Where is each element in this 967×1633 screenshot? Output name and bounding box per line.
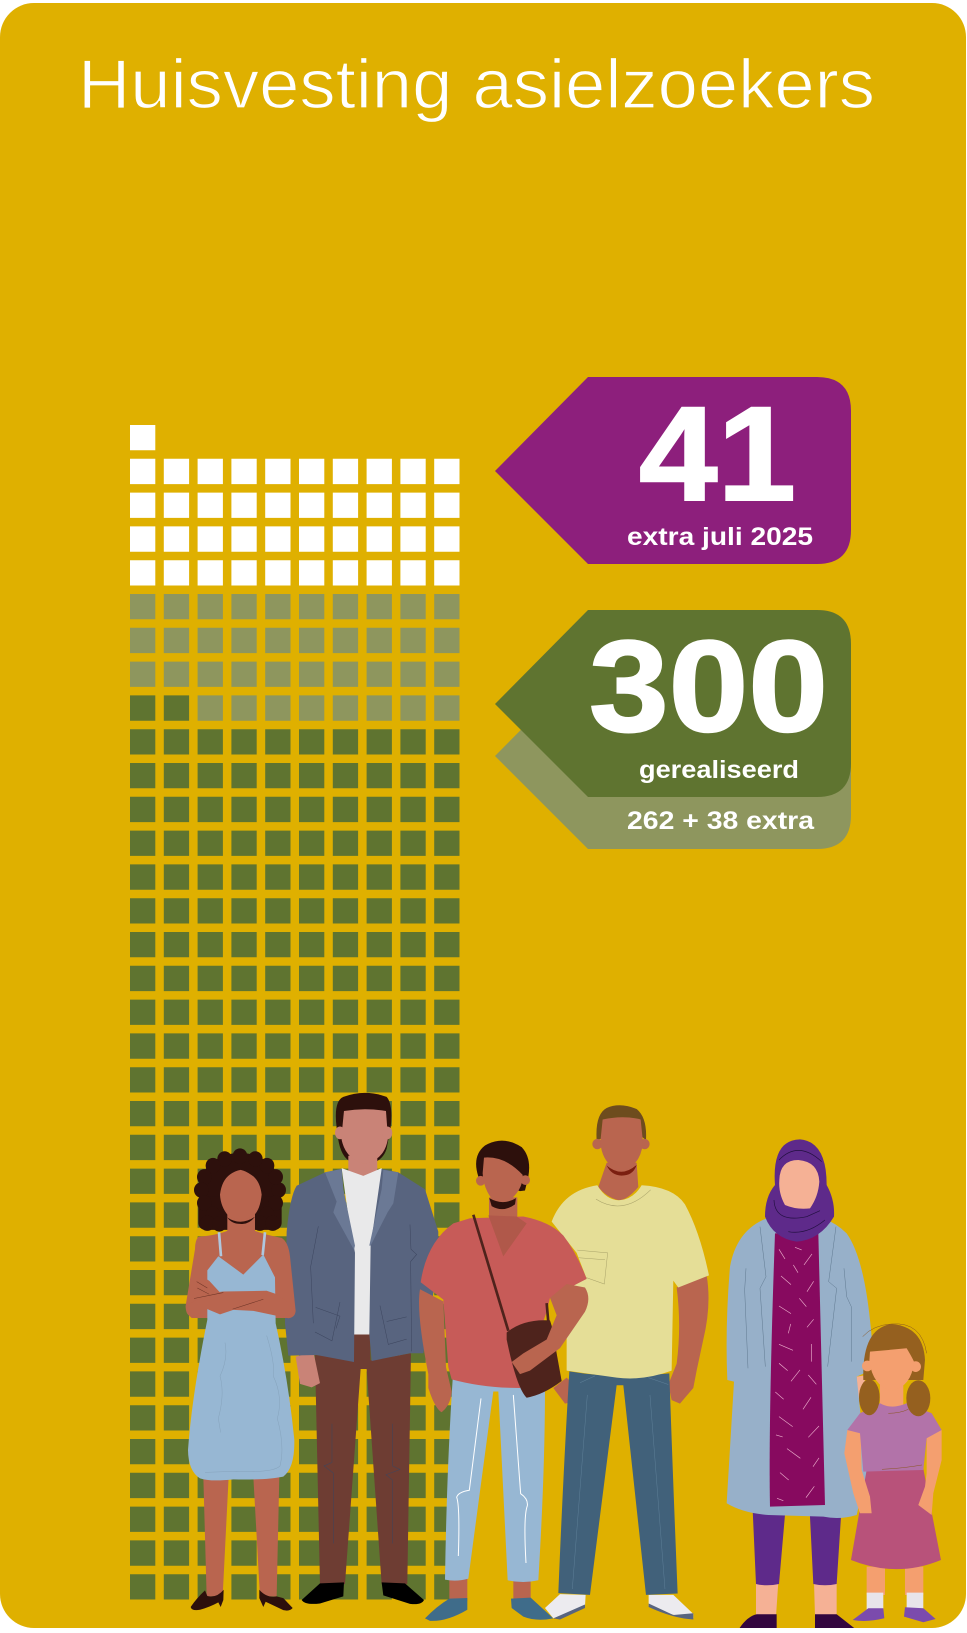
- person: woman in blue dress: [186, 1148, 296, 1611]
- callout: 262 + 38 extra (light tag): [495, 662, 851, 849]
- callout: 300 gerealiseerd: [495, 610, 851, 797]
- callout: 41 extra juli 2025: 41: [639, 380, 796, 529]
- callout: 262 + 38 extra (light tag): 262 + 38 extra: [627, 807, 815, 835]
- white squares: 41 extra: [130, 438, 460, 573]
- callout: 41 extra juli 2025: [495, 377, 851, 564]
- people illustration: [186, 1093, 942, 1630]
- dark green squares: 262 realised: [130, 708, 460, 1587]
- person: man in yellow shirt: [545, 1105, 709, 1619]
- callout: 300 gerealiseerd: gerealiseerd: [639, 756, 799, 784]
- person: woman with purple headscarf: [727, 1139, 872, 1630]
- person: man with red shirt and bag: [419, 1141, 588, 1621]
- person: girl with pigtails: [844, 1324, 942, 1622]
- title: Huisvesting asielzoekers: [78, 45, 875, 123]
- callout: 300 gerealiseerd: 300: [589, 613, 828, 759]
- person: man with blue jacket: [285, 1093, 438, 1604]
- light green squares: 38 extra: [130, 607, 460, 708]
- callout: 41 extra juli 2025: extra juli 2025: [627, 523, 813, 551]
- waffle chart: one square per housing place: [130, 438, 460, 1587]
